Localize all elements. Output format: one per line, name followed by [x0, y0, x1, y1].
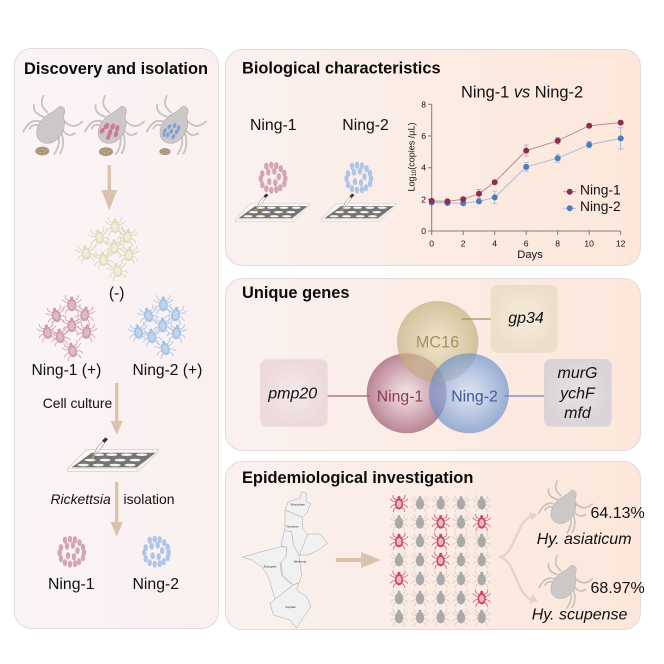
- map of Ningxia: Shizuishan: [290, 503, 305, 507]
- icon: well plate: [68, 437, 158, 472]
- label: Ning-1: Ning-1: [250, 117, 297, 134]
- cluster: negative ticks: [75, 218, 140, 282]
- map of Ningxia: Wuzhong: [294, 560, 307, 564]
- arrow: map to ticks: [336, 552, 381, 568]
- arrow: down to larvae: [101, 165, 117, 210]
- heading: biological characteristics: Biological characteristics: [242, 60, 441, 78]
- box: gp34: [491, 285, 558, 353]
- panel: discovery and isolation: [14, 48, 218, 628]
- arrow: cell culture: [111, 383, 123, 435]
- map of Ningxia: Yinchuan: [286, 525, 299, 529]
- venn diagram: Ning-2: [451, 389, 498, 406]
- line chart: 4: [492, 239, 497, 249]
- label: Ning-2: Ning-2: [132, 576, 179, 593]
- line chart: 4: [421, 163, 426, 173]
- line chart: [406, 99, 626, 261]
- icon: Hy. scupense tick: [539, 556, 592, 608]
- label: cell culture: Cell culture: [43, 395, 112, 411]
- label: Ning-2 positive: Ning-2 (+): [132, 362, 202, 379]
- line chart: 0: [421, 226, 426, 236]
- cluster: Ning-2 positive ticks: [127, 296, 187, 360]
- icon: eggs: [35, 147, 171, 156]
- chart title: Ning-1 vs Ning-2: [461, 83, 583, 101]
- box: murG ychF mfd: murG: [558, 365, 598, 382]
- label: Ning-2: Ning-2: [342, 117, 389, 134]
- label: Rickettsia isolation: Rickettsia: [50, 491, 111, 507]
- chart legend: Ning-2: [580, 199, 621, 214]
- line chart: 10: [584, 239, 594, 249]
- venn diagram: [367, 301, 509, 433]
- panel: epidemiological investigation: [226, 462, 645, 630]
- heading: epidemiological investigation: Epidemiological investigation: [242, 469, 473, 487]
- arrow: isolation: [111, 482, 123, 537]
- label: negative: (-): [109, 285, 124, 302]
- line chart: Log: [406, 176, 416, 191]
- venn diagram: Ning-1: [377, 389, 423, 406]
- icon: Ning-1 bacteria: [259, 162, 287, 194]
- label: Ning-1: Ning-1: [48, 576, 95, 593]
- icon: Ning-2 bacteria: [344, 162, 373, 194]
- icon: Ning-1 bacteria: [57, 536, 86, 568]
- value: 68.97%: 68.97%: [590, 580, 645, 597]
- value: 64.13%: 64.13%: [590, 505, 645, 522]
- arrow: branching to tick species: [499, 512, 538, 604]
- label: Ning-1 positive: Ning-1 (+): [32, 362, 101, 379]
- venn diagram: MC16: [416, 334, 459, 352]
- panel: biological characteristics: [226, 50, 640, 266]
- line chart: 8: [555, 239, 560, 249]
- line chart: 2: [461, 239, 466, 249]
- box: murG ychF mfd: mfd: [564, 405, 592, 422]
- panel: unique genes: [226, 278, 640, 450]
- line chart: 6: [524, 239, 529, 249]
- icon: tick with blue rickettsia: [147, 96, 206, 154]
- icon: Hy. asiaticum tick: [539, 481, 592, 533]
- tick sampling grid: [390, 495, 490, 625]
- heading: unique genes: Unique genes: [242, 284, 349, 302]
- line chart: (copies /µL): [406, 123, 416, 170]
- label: Hy. asiaticum: Hy. asiaticum: [537, 531, 632, 548]
- connector lines: [328, 319, 544, 396]
- cluster: Ning-1 positive ticks: [36, 296, 97, 362]
- icon: well plate Ning-2: [321, 193, 396, 222]
- box: pmp20: [260, 359, 328, 427]
- box: gp34: gp34: [508, 310, 544, 327]
- box: murG ychF mfd: ychF: [559, 385, 596, 402]
- line chart: 8: [421, 99, 426, 109]
- icon: uninfected tick: [23, 96, 82, 154]
- chart legend: [563, 182, 621, 214]
- icon: tick with pink rickettsia: [85, 96, 144, 154]
- box: pmp20: pmp20: [267, 386, 317, 402]
- box: murG ychF mfd: [544, 359, 612, 427]
- chart legend: Ning-1: [580, 182, 621, 197]
- map of Ningxia: [242, 492, 328, 628]
- map of Ningxia: Zhongwei: [264, 565, 277, 569]
- line chart: 6: [421, 131, 426, 141]
- map of Ningxia: Guyuan: [285, 605, 296, 609]
- line chart: 2: [421, 194, 426, 204]
- line chart: 12: [616, 239, 626, 249]
- label: Hy. scupense: Hy. scupense: [532, 606, 628, 623]
- icon: well plate Ning-1: [235, 193, 310, 222]
- line chart: Days: [517, 249, 543, 261]
- heading: discovery and isolation: Discovery and isolation: [24, 60, 208, 78]
- icon: Ning-2 bacteria: [142, 536, 171, 568]
- line chart: 0: [429, 239, 434, 249]
- label: Rickettsia isolation: isolation: [124, 491, 174, 507]
- line chart: 10: [412, 169, 418, 176]
